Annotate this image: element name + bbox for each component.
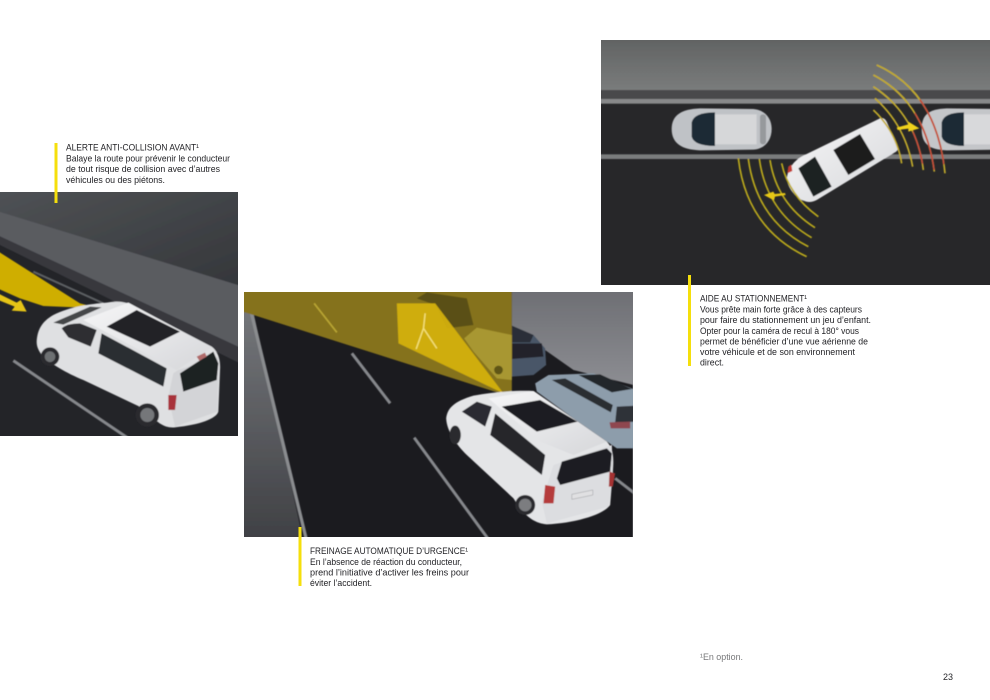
text: automatic emergency braking: En l’absence de réaction du conducteur, (310, 557, 462, 567)
arrow: towards front car (897, 122, 919, 132)
text: forward collision alert: de tout risque de collision avec d’autres (66, 164, 220, 174)
text: parking assist: Vous prête main forte grâce à des capteurs (700, 304, 862, 314)
panel: parking assist photo (601, 40, 990, 285)
text: parking assist: votre véhicule et de son environnement (700, 347, 855, 357)
road marking (13, 361, 128, 438)
panel: forward collision alert photo (0, 192, 238, 436)
road edge line (250, 305, 307, 542)
text: forward collision alert (66, 142, 230, 185)
left shoulder (237, 285, 304, 542)
text: parking assist: permet de bénéficier d’une vue aérienne de (700, 336, 868, 346)
text: automatic emergency braking: prend l’initiative d’activer les freins pour (310, 568, 469, 578)
text: parking assist (700, 294, 871, 368)
red proximity waves (912, 98, 945, 170)
text: parking assist: Opter pour la caméra de recul à 180° vous (700, 326, 859, 336)
manoeuvring white vehicle (787, 118, 898, 202)
front sensor waves (873, 65, 945, 173)
sensor beam (0, 248, 100, 308)
white van (446, 391, 615, 524)
text: forward collision alert: ALERTE ANTI-COLLISION AVANT¹ (66, 142, 199, 152)
rear sensor waves (738, 158, 818, 257)
text: automatic emergency braking: FREINAGE AUTOMATIQUE D’URGENCE¹ (310, 546, 468, 556)
pedestrian (416, 313, 437, 349)
text: forward collision alert: Balaye la route pour prévenir le conducteur (66, 154, 230, 164)
lane markings (352, 353, 637, 542)
accent bar: forward collision (54, 143, 58, 203)
bright sensor beam (397, 303, 504, 393)
accent bar: parking assist (688, 275, 691, 366)
upper right grey ground (512, 285, 640, 387)
accent bar: emergency braking (298, 527, 302, 586)
panel: automatic emergency braking photo (244, 292, 633, 537)
page number: 23 (943, 672, 953, 682)
blue parked car (512, 326, 546, 377)
beam arrow (0, 293, 27, 312)
parked car right (922, 108, 990, 150)
text: parking assist: pour faire du stationnement un jeu d’enfant. (700, 315, 871, 325)
grey-blue parked car (535, 373, 640, 448)
parked car left (672, 108, 772, 150)
yellow detection zone (237, 285, 512, 393)
text: parking assist: AIDE AU STATIONNEMENT¹ (700, 294, 807, 304)
footnote: ¹En option. (700, 652, 743, 662)
text: automatic emergency braking (310, 546, 469, 588)
white van (37, 302, 220, 427)
text: automatic emergency braking: éviter l’accident. (310, 578, 372, 588)
text: parking assist: direct. (700, 358, 724, 368)
text: forward collision alert: véhicules ou des piétons. (66, 175, 165, 185)
arrow: behind vehicle (764, 192, 786, 200)
cars in detection zone (417, 292, 512, 380)
